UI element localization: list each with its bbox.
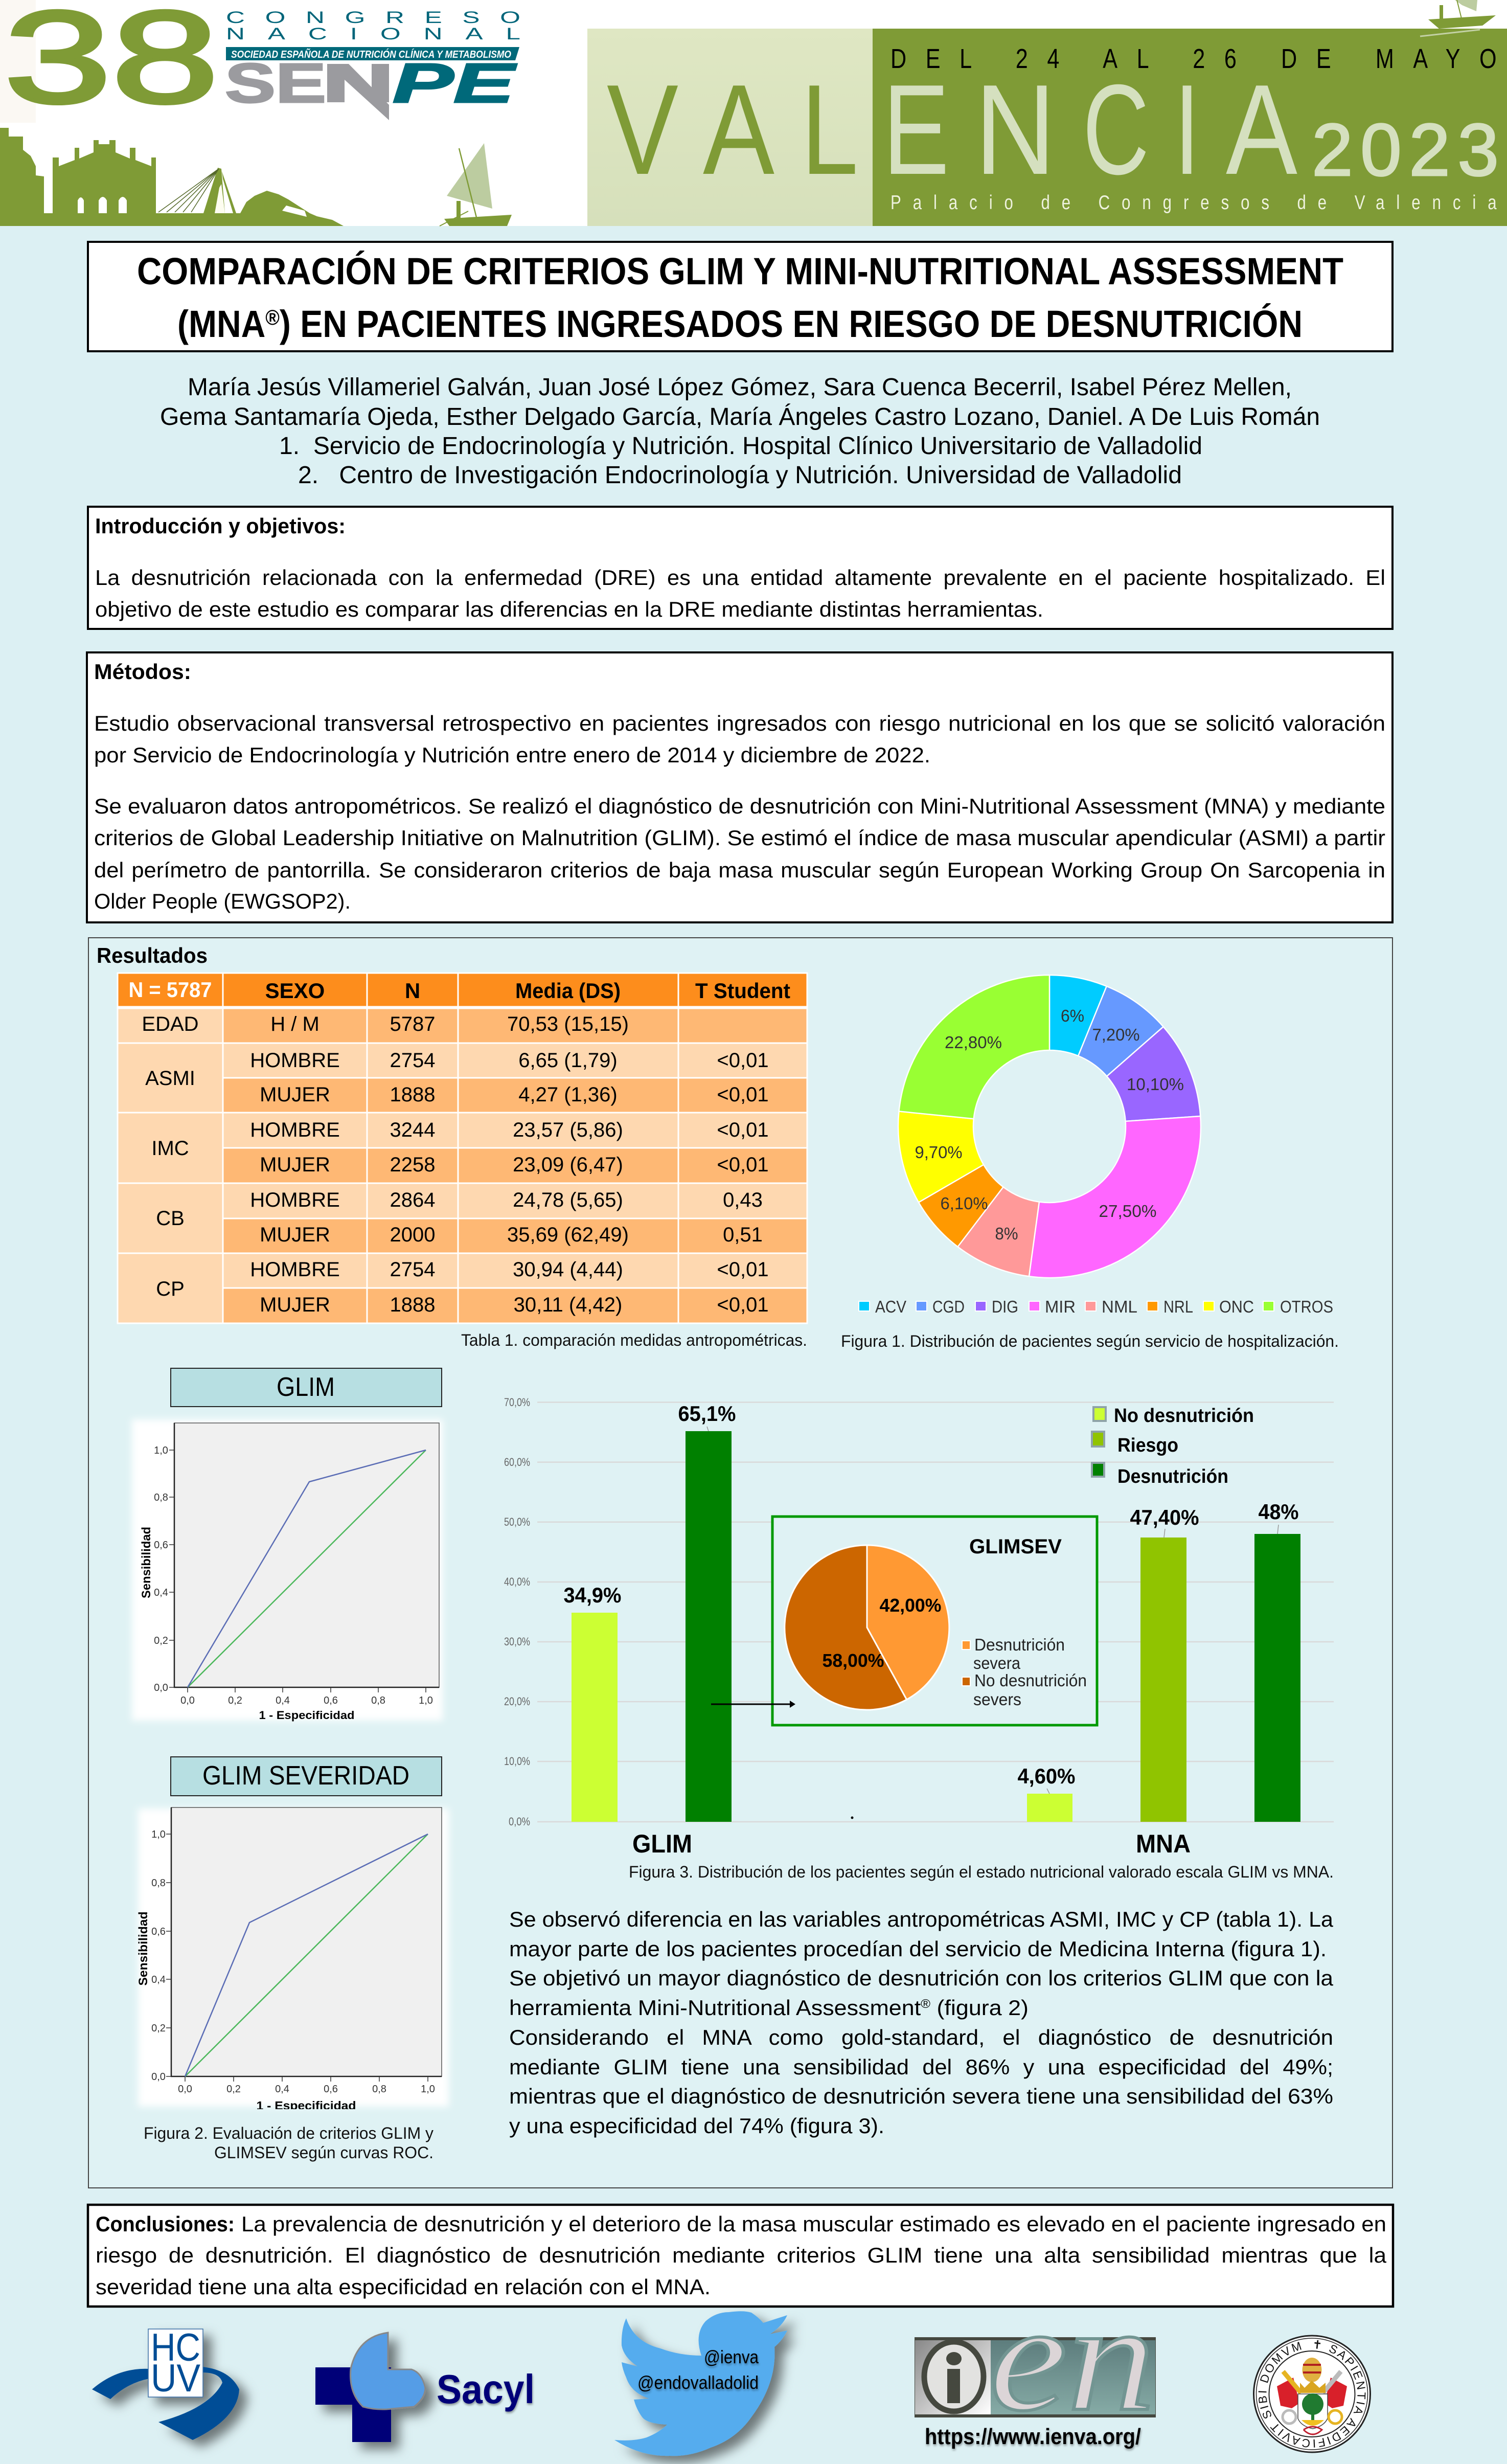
donut legend: NRL [1163, 1297, 1193, 1316]
rows imc: 23,09 (6,47) [513, 1154, 623, 1176]
GLIM heading box: GLIM [277, 1372, 335, 1402]
bar legend [1092, 1405, 1254, 1487]
rows imc: MUJER [260, 1154, 330, 1176]
results discussion text: Considerando el MNA como gold-standard, el diagnóstico de desnutrición [509, 2025, 1333, 2049]
x axis ticks: 0,2 [228, 1695, 242, 1706]
seal motto: ✝ SAPIENTIA AEDIFICAVIT SIBI DOMVM [1259, 2340, 1366, 2448]
y axis ticks: 0,4 [151, 1974, 166, 1985]
bar legend: No desnutrición [1114, 1405, 1254, 1427]
pie labels: 58,00% [822, 1650, 884, 1671]
y axis ticks: 0,4 [154, 1587, 168, 1598]
donut legend: NML [1102, 1297, 1137, 1316]
x axis ticks: 0,6 [324, 2084, 338, 2095]
logo: HCUV: HC [151, 2326, 200, 2369]
x axis ticks: 0,0 [178, 2084, 192, 2095]
logo: IEN [915, 2273, 1156, 2443]
axis titles: Sensibilidad [140, 1527, 153, 1598]
ROC chart GLIM severidad [136, 1807, 449, 2112]
inset legend: No desnutrición [974, 1671, 1087, 1690]
x axis ticks: 1,0 [421, 2084, 435, 2095]
logo: Sacyl [315, 2333, 535, 2442]
rows cb: 0,43 [723, 1189, 763, 1211]
figure 2 caption [144, 2124, 433, 2162]
donut legend: DIG [992, 1297, 1018, 1316]
results discussion text: mediante GLIM tiene una sensibilidad del 86% y una especificidad del 49%; [509, 2055, 1333, 2079]
table header cells [118, 973, 807, 1007]
bar values [563, 1401, 1298, 1788]
panel: resultados [88, 938, 1392, 2188]
group labels: GLIM [632, 1829, 692, 1858]
GLIM heading box [171, 1368, 442, 1407]
first column cells [118, 1008, 223, 1323]
paragraph 1: Estudio observacional transversal retrospectivo en pacientes ingresados con riesgo nutricional en los que se solicitó valoración [94, 711, 1385, 735]
y axis ticks: 0,6 [151, 1926, 166, 1937]
logo: IEN: en [989, 2273, 1155, 2443]
results discussion text: y una especificidad del 74% (figura 3). [509, 2114, 884, 2138]
figure 2 caption: GLIMSEV según curvas ROC. [214, 2143, 433, 2162]
donut labels: 7,20% [1092, 1025, 1140, 1044]
authors and affiliations: Gema Santamaría Ojeda, Esther Delgado García, María Ángeles Castro Lozano, Daniel. A De Luis Román [160, 403, 1320, 431]
results discussion text: (figura 2) [930, 1996, 1029, 2020]
group labels [632, 1829, 1191, 1858]
gridlines and axis labels: 30,0% [504, 1635, 530, 1648]
congreso nacional wording: CONGRESO [226, 9, 520, 27]
authors and affiliations: 2. Centro de Investigación Endocrinología y Nutrición. Universidad de Valladolid [298, 462, 1182, 489]
gridlines and axis labels [504, 1396, 1334, 1828]
rows cp: 1888 [390, 1294, 435, 1316]
table header labels [129, 978, 790, 1003]
light rows [223, 1043, 807, 1288]
rows asmi: <0,01 [717, 1083, 769, 1106]
ENCIA letters: E [883, 58, 949, 201]
figure 2 caption: Figura 2. Evaluación de criterios GLIM y [144, 2124, 433, 2142]
bar chart [504, 1396, 1334, 1858]
heading: Resultados [97, 943, 208, 967]
rows imc: IMC [151, 1137, 189, 1160]
panel: conclusiones: La prevalencia de desnutrición y el deterioro de la masa muscular estimado es elevado en el paciente ingresado en [241, 2212, 1386, 2236]
darker rows [223, 1008, 807, 1323]
axis titles: 1 - Especificidad [259, 1709, 355, 1722]
panel: conclusiones: Conclusiones: [96, 2212, 235, 2236]
paragraph 1: por Servicio de Endocrinología y Nutrición entre enero de 2014 y diciembre de 2022. [94, 743, 930, 767]
paragraph: objetivo de este estudio es comparar las diferencias en la DRE mediante distintas herramientas. [95, 597, 1043, 621]
row edad: 5787 [390, 1013, 435, 1035]
paragraph 2: criterios de Global Leadership Initiative on Malnutrition (GLIM). Se estimó el índice de masa muscular apendicular (ASMI) a partir [94, 826, 1385, 850]
rows imc: 23,57 (5,86) [513, 1119, 623, 1141]
y axis ticks: 0,6 [154, 1540, 168, 1551]
SENPE logo: SE [225, 52, 326, 115]
axis titles [136, 1911, 356, 2112]
results discussion text: herramienta Mini-Nutritional Assessment [509, 1996, 895, 2020]
year: 2023 [1312, 108, 1499, 191]
authors and affiliations: 1. Servicio de Endocrinología y Nutrición. Hospital Clínico Universitario de Valladolid [279, 433, 1202, 460]
panel: conclusiones: riesgo de desnutrición. El diagnóstico de desnutrición mediante criterios GLIM tiene una alta sensibilidad mientras que la [96, 2243, 1387, 2267]
heading: Introducción y objetivos: [95, 514, 346, 538]
y axis ticks: 0,8 [154, 1492, 168, 1503]
VAL letters: A [703, 58, 774, 201]
y axis ticks: 1,0 [151, 1829, 166, 1840]
rows asmi: 2754 [390, 1049, 435, 1072]
results discussion text: Se observó diferencia en las variables antropométricas ASMI, IMC y CP (tabla 1). La [509, 1907, 1334, 1931]
rows cb [156, 1189, 763, 1246]
gridlines and axis labels: 20,0% [504, 1695, 530, 1708]
rows imc: 2258 [390, 1154, 435, 1176]
bar legend: Riesgo [1117, 1435, 1178, 1456]
venue: Palacio de Congresos de Valencia [890, 192, 1497, 214]
axis titles [140, 1527, 355, 1722]
x axis ticks: 0,2 [226, 2084, 241, 2095]
paragraph 2: Se evaluaron datos antropométricos. Se realizó el diagnóstico de desnutrición con Mini-Nutritional Assessment (MNA) y mediante [94, 794, 1385, 818]
pie labels [822, 1595, 942, 1671]
rows cb: 35,69 (62,49) [507, 1224, 629, 1246]
rows asmi [145, 1049, 769, 1106]
rows cb: HOMBRE [250, 1189, 340, 1211]
bar values: 4,60% [1017, 1764, 1076, 1788]
ENCIA letters: N [975, 58, 1056, 201]
logo: university seal [1253, 2336, 1370, 2452]
donut legend: ACV [875, 1297, 906, 1316]
bar values: 34,9% [563, 1583, 622, 1607]
gridlines and axis labels: 70,0% [504, 1396, 530, 1409]
inset legend: severs [973, 1690, 1021, 1709]
bars [572, 1431, 1300, 1822]
rows cb: 24,78 (5,65) [513, 1189, 623, 1211]
rows asmi: MUJER [260, 1083, 330, 1106]
rows cb: 2000 [390, 1224, 435, 1246]
table caption: Tabla 1. comparación medidas antropométricas. [461, 1331, 807, 1349]
logo: twitter: @endovalladolid [637, 2372, 759, 2393]
SENPE society band: SOCIEDAD ESPAÑOLA DE NUTRICIÓN CLÍNICA Y METABOLISMO [231, 48, 511, 60]
rows asmi: 1888 [390, 1083, 435, 1106]
inset legend: Desnutrición [974, 1635, 1065, 1654]
results discussion text: ® [921, 1997, 930, 2011]
x axis ticks: 0,8 [372, 2084, 386, 2095]
paragraph 1 [94, 711, 1385, 767]
gridlines and axis labels: 50,0% [504, 1516, 530, 1528]
ENCIA letters [883, 58, 1297, 201]
rows imc: <0,01 [717, 1154, 769, 1176]
logo: twitter [614, 2311, 787, 2456]
congreso nacional wording [226, 9, 520, 43]
bar legend: Desnutrición [1117, 1466, 1228, 1487]
x axis ticks: 0,0 [180, 1695, 195, 1706]
logo: HCUV [92, 2326, 239, 2440]
y axis ticks [151, 1829, 428, 2083]
paragraph 2: del perímetro de pantorrilla. Se consideraron criterios de baja masa muscular según European Working Group On Sarcopenia in [94, 858, 1385, 882]
ROC chart GLIM [132, 1419, 443, 1722]
donut legend: CGD [932, 1297, 965, 1316]
bar values: 47,40% [1130, 1505, 1199, 1529]
panel: introducción y objetivos [88, 507, 1392, 629]
rows imc: HOMBRE [250, 1119, 340, 1141]
VAL letters [607, 58, 858, 201]
arrow to inset [711, 1701, 795, 1708]
table 1 [118, 973, 807, 1323]
rows imc: 3244 [390, 1119, 435, 1141]
authors and affiliations: María Jesús Villameriel Galván, Juan José López Gómez, Sara Cuenca Becerril, Isabel Pérez Mellen, [188, 374, 1292, 401]
SENPE logo [225, 52, 517, 120]
axis titles: Sensibilidad [136, 1911, 150, 1986]
rows cp: 2754 [390, 1258, 435, 1281]
x axis ticks: 0,8 [371, 1695, 385, 1706]
rows asmi: HOMBRE [250, 1049, 340, 1072]
ENCIA letters: C [1083, 58, 1149, 201]
Valencia skyline [0, 128, 344, 226]
header panel: olive green [873, 29, 1507, 226]
donut legend: MIR [1045, 1297, 1076, 1316]
donut legend: OTROS [1280, 1297, 1333, 1316]
pie labels: 42,00% [879, 1595, 942, 1616]
group labels: MNA [1136, 1829, 1191, 1858]
rows cp: <0,01 [717, 1258, 769, 1281]
paragraph: La desnutrición relacionada con la enfermedad (DRE) es una entidad altamente prevalente en el paciente hospitalizado. El [95, 566, 1385, 590]
ROC curves [185, 1834, 428, 2076]
header banner [0, 0, 1507, 226]
title box: ® [265, 305, 280, 329]
donut legend [859, 1297, 1333, 1316]
inset title: GLIMSEV [969, 1535, 1062, 1558]
bar values: 48% [1259, 1500, 1298, 1524]
donut labels: 8% [995, 1224, 1018, 1243]
y axis ticks: 0,0 [154, 1682, 168, 1693]
GLIM severidad heading box: GLIM SEVERIDAD [202, 1761, 409, 1791]
VAL letters: V [607, 58, 678, 201]
x axis ticks: 0,4 [275, 2084, 289, 2095]
x axis ticks: 1,0 [419, 1695, 433, 1706]
panel: conclusiones [88, 2205, 1393, 2307]
ROC curves [188, 1450, 426, 1687]
table header labels: N = 5787 [129, 978, 212, 1002]
y axis ticks [154, 1445, 426, 1693]
results discussion text: mientras que el diagnóstico de desnutrición severa tiene una sensibilidad del 63% [509, 2084, 1333, 2108]
donut labels: 6% [1061, 1006, 1084, 1025]
rows cb: 0,51 [723, 1224, 763, 1246]
GLIM severidad heading box [171, 1757, 442, 1796]
rows cp: 30,11 (4,42) [514, 1294, 622, 1316]
table header labels: N [405, 979, 420, 1003]
SENPE logo: PE [393, 52, 517, 115]
axis titles: 1 - Especificidad [257, 2099, 356, 2112]
date: DEL 24 AL 26 DE MAYO [890, 44, 1497, 74]
donut labels: 9,70% [915, 1143, 962, 1162]
congreso nacional wording: NACIONAL [226, 25, 520, 43]
results discussion text [509, 1907, 1334, 2138]
rows cp: 30,94 (4,44) [513, 1258, 623, 1281]
title box: COMPARACIÓN DE CRITERIOS GLIM Y MINI-NUTRITIONAL ASSESSMENT [137, 250, 1343, 292]
rows cp: <0,01 [717, 1294, 769, 1316]
table header labels: Media (DS) [515, 979, 621, 1003]
rows cp: CP [156, 1278, 185, 1300]
VAL letters: L [801, 58, 858, 201]
panel: métodos [87, 652, 1392, 922]
y axis ticks: 1,0 [154, 1445, 168, 1456]
figure 3 caption: Figura 3. Distribución de los pacientes según el estado nutricional valorado escala GLIM vs MNA. [629, 1863, 1334, 1881]
table header labels: SEXO [265, 979, 325, 1003]
results discussion text: Se objetivó un mayor diagnóstico de desnutrición con los criterios GLIM que con la [509, 1966, 1334, 1990]
IEN url: https://www.ienva.org/ [925, 2424, 1141, 2449]
figure 1 caption: Figura 1. Distribución de pacientes según servicio de hospitalización. [841, 1332, 1339, 1350]
rows imc [151, 1119, 769, 1176]
donut legend: ONC [1219, 1297, 1254, 1316]
sailing boat right [1420, 0, 1496, 36]
coat of arms [1277, 2358, 1347, 2434]
rows cp: HOMBRE [250, 1258, 340, 1281]
inset: GLIMSEV pie [772, 1517, 1097, 1725]
header panel: light green [587, 29, 873, 226]
gridlines and axis labels: 60,0% [504, 1456, 530, 1468]
title box: EN PACIENTES INGRESADOS EN RIESGO DE DESNUTRICIÓN [301, 303, 1425, 345]
y axis ticks: 0,8 [151, 1878, 166, 1889]
logo: HCUV: UV [151, 2357, 200, 2400]
gridlines and axis labels: 40,0% [504, 1575, 530, 1588]
ENCIA letters: A [1226, 58, 1297, 201]
paragraph [95, 566, 1385, 621]
row edad: H / M [270, 1013, 319, 1035]
gridlines and axis labels: 0,0% [509, 1815, 530, 1828]
x axis ticks [178, 2084, 435, 2095]
rows cp: MUJER [260, 1294, 330, 1316]
authors and affiliations [160, 374, 1320, 489]
title box: (MNA [177, 303, 276, 345]
donut labels: 10,10% [1127, 1075, 1184, 1094]
title box [88, 242, 1392, 351]
y axis ticks: 0,2 [154, 1635, 168, 1646]
inset legend [962, 1635, 1087, 1709]
panel: conclusiones: severidad tiene una alta especificidad en relación con el MNA. [96, 2275, 711, 2299]
rows cb: CB [156, 1207, 185, 1230]
y axis ticks: 0,0 [151, 2071, 166, 2083]
paragraph 2: Older People (EWGSOP2). [94, 889, 351, 913]
rows asmi: 6,65 (1,79) [518, 1049, 618, 1072]
x axis ticks [180, 1695, 433, 1706]
rows imc: <0,01 [717, 1119, 769, 1141]
row edad: 70,53 (15,15) [507, 1013, 629, 1035]
donut labels: 27,50% [1099, 1202, 1156, 1220]
row edad: EDAD [142, 1013, 199, 1035]
logo: Sacyl: Sacyl [437, 2366, 535, 2412]
y axis ticks: 0,2 [151, 2023, 166, 2034]
row edad [142, 1013, 629, 1035]
rows cp [156, 1258, 769, 1316]
ENCIA letters: I [1174, 58, 1200, 201]
bar values: 65,1% [678, 1401, 736, 1426]
heading: Métodos: [94, 660, 191, 684]
rows asmi: <0,01 [717, 1049, 769, 1072]
donut chart [898, 975, 1201, 1278]
title box: ) [280, 303, 291, 345]
donut labels [915, 1006, 1184, 1243]
rows cb: 2864 [390, 1189, 435, 1211]
table header labels: T Student [695, 979, 790, 1003]
rows asmi: ASMI [145, 1067, 195, 1090]
gridlines and axis labels: 10,0% [504, 1755, 530, 1768]
donut labels: 22,80% [945, 1033, 1002, 1052]
rows asmi: 4,27 (1,36) [518, 1083, 618, 1106]
donut labels: 6,10% [941, 1194, 988, 1213]
inset legend: severa [973, 1654, 1021, 1672]
paragraph 2 [94, 794, 1385, 913]
results discussion text: mayor parte de los pacientes procedían del servicio de Medicina Interna (figura 1). [509, 1937, 1327, 1961]
sailing boat left [440, 143, 512, 226]
rows cb: MUJER [260, 1224, 330, 1246]
x axis ticks: 0,6 [324, 1695, 338, 1706]
logo: twitter: @ienva [704, 2346, 759, 2367]
x axis ticks: 0,4 [276, 1695, 290, 1706]
pie chart [785, 1545, 949, 1710]
